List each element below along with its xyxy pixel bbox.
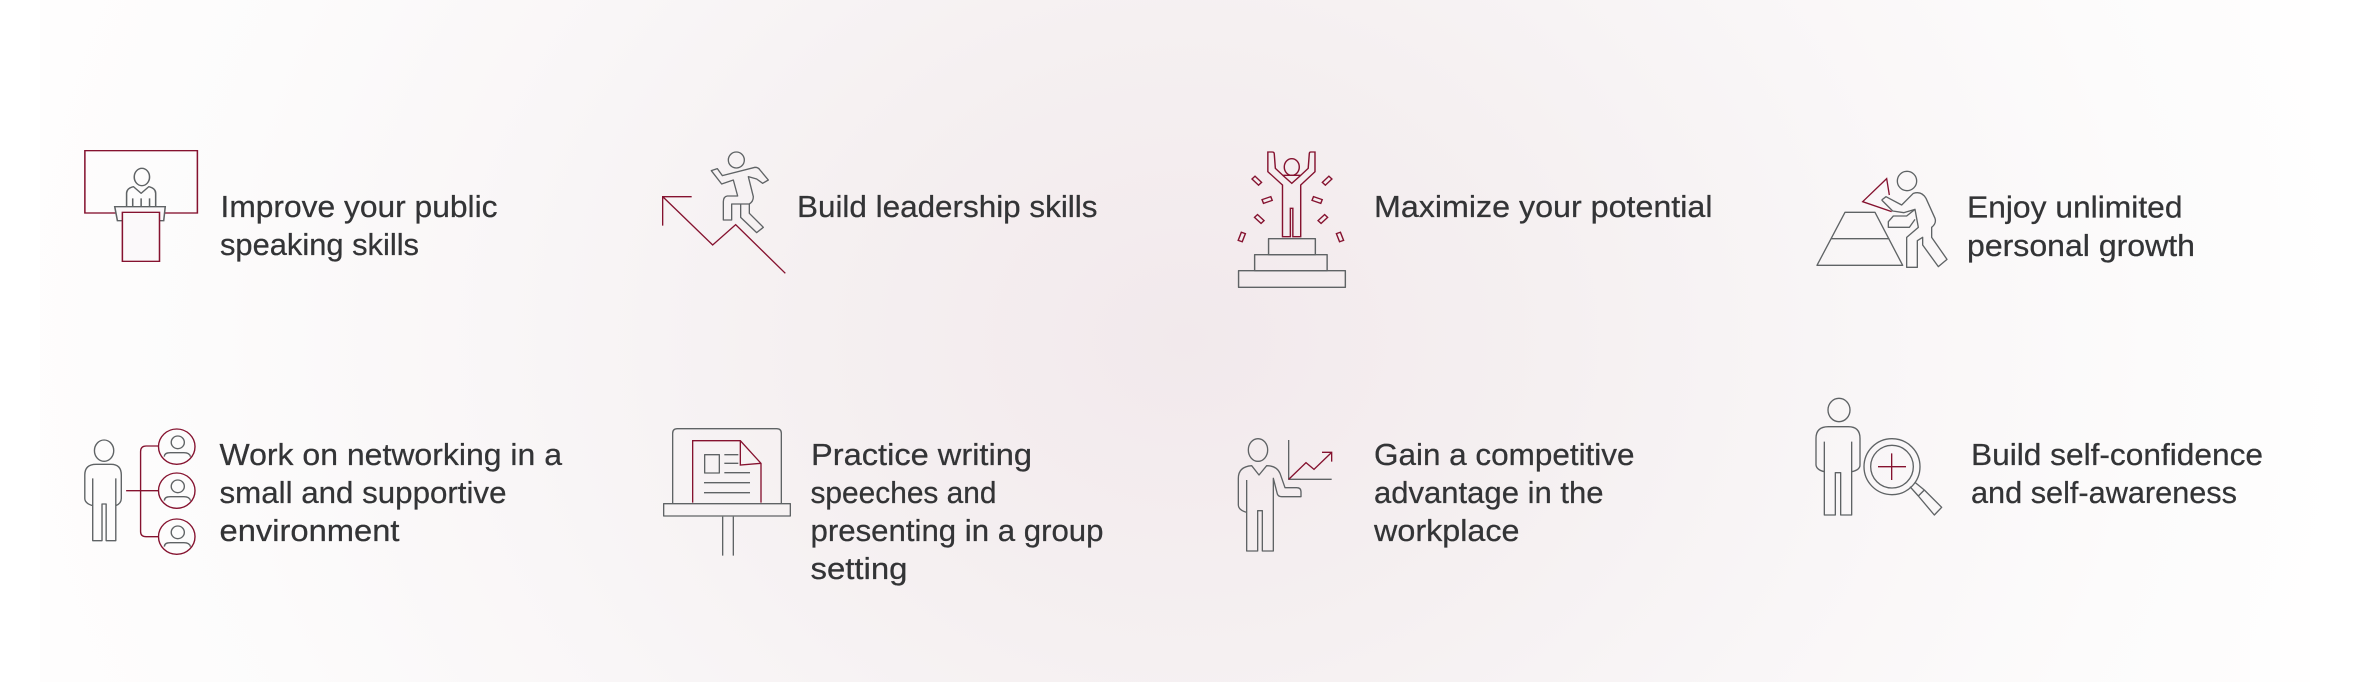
text: improve public speaking [220,189,498,262]
text: competitive advantage: workplace [1373,513,1520,548]
icon: presenter with chart [1238,439,1332,551]
item: self-confidence [1816,398,2263,515]
text: networking: Work on networking in a [220,437,563,472]
item: writing and presenting [664,429,1104,586]
icon: figure building pyramid [1817,171,1947,267]
text: self-confidence: and self-awareness [1971,475,2237,510]
text: personal growth: Enjoy unlimited [1967,190,2182,224]
text: competitive advantage [1373,437,1634,548]
text: writing and presenting: setting [810,551,908,586]
icon: person connected to three contacts [85,429,195,554]
text: improve public speaking: speaking skills [220,227,419,262]
text: competitive advantage: advantage in the [1374,475,1604,510]
text: competitive advantage: Gain a competitive [1374,437,1634,472]
text: build leadership: Build leadership skills [797,189,1098,224]
item: personal growth [1817,171,2195,267]
text: personal growth [1967,190,2195,263]
text: writing and presenting: Practice writing [811,437,1032,472]
text: personal growth: personal growth [1967,228,2195,263]
icon: figure climbing arrow [663,152,785,273]
text: networking: environment [220,513,400,548]
text: self-confidence: Build self-confidence [1971,437,2263,472]
text: writing and presenting: presenting in a group [810,513,1104,548]
text: self-confidence [1971,437,2263,510]
item: build leadership [663,152,1098,273]
text: writing and presenting: speeches and [810,475,996,510]
text: writing and presenting [810,437,1104,586]
icon: person with magnifier [1816,398,1942,515]
item: networking [85,429,563,554]
icon: speaker at lectern [85,151,197,261]
item: maximize potential [1238,152,1712,287]
icon: figure on podium [1238,152,1345,287]
text: networking [220,437,563,548]
text: maximize potential: Maximize your potential [1374,189,1712,224]
item: competitive advantage [1238,437,1634,551]
item: improve public speaking [85,151,498,262]
text: networking: small and supportive [220,475,506,510]
text: improve public speaking: Improve your public [220,189,498,224]
icon: document on screen [664,429,790,556]
